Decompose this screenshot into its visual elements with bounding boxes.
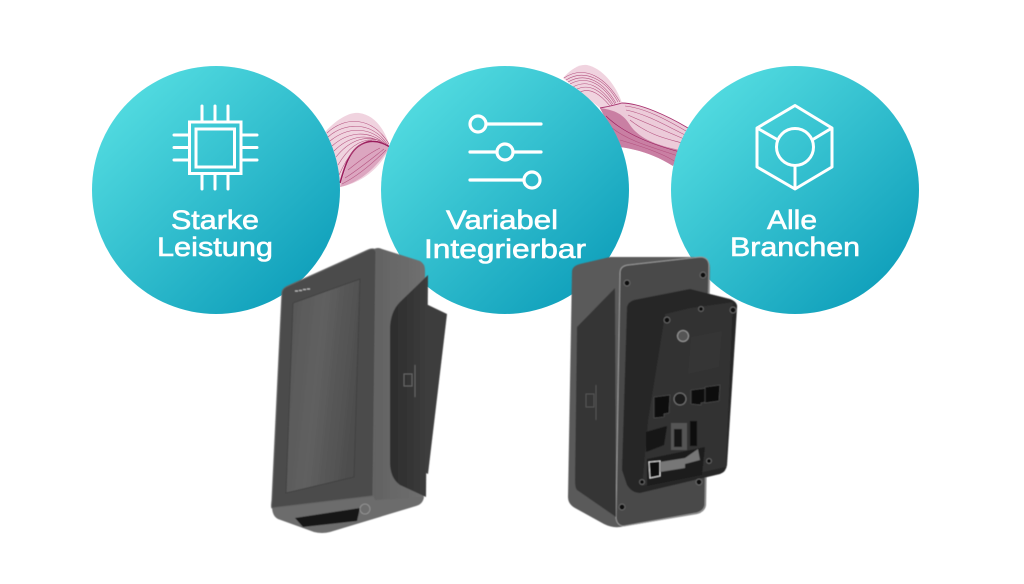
label: Alle Branchen: Branchen [730,232,860,262]
device: front view [272,248,447,533]
label: Alle Branchen: Alle [767,205,817,235]
antenna connector [678,330,688,342]
usb and lower ports [646,421,697,452]
icon: hexagonal cube [757,106,832,189]
side of housing [362,248,425,522]
ethernet ports [654,385,720,418]
icon: sliders [470,116,541,188]
screws [619,272,736,510]
circle: Variabel Integrierbar [381,66,629,314]
label: Variabel Integrierbar: Integrierbar [424,234,586,264]
label: Starke Leistung: Leistung [157,232,273,262]
label recess [688,331,722,374]
mounting plate [616,257,709,526]
contactless mark [586,385,596,420]
terminal connector [647,447,705,486]
device: back view [568,257,737,527]
bottom scanner slot [295,508,360,527]
circle: Starke Leistung [92,66,340,314]
label: Variabel Integrierbar [424,205,586,264]
label: Variabel Integrierbar: Variabel [446,205,558,235]
bottom button [360,504,370,514]
decorative wave right [563,65,688,166]
contactless mark [404,365,415,397]
side reader panel [575,288,616,517]
black module [622,289,737,493]
card reader [390,275,428,497]
label: Starke Leistung: Starke [171,205,259,235]
label: Alle Branchen [730,205,860,262]
screen [286,279,360,493]
status LEDs [295,289,310,291]
circle: Alle Branchen [671,66,919,314]
rear reader fin [420,304,447,474]
audio jack [674,393,686,405]
underside of housing [272,492,424,533]
housing [568,257,710,527]
front body [272,249,376,508]
label: Starke Leistung [157,205,273,262]
decorative wave left [325,113,390,187]
icon: processor chip [174,106,257,189]
